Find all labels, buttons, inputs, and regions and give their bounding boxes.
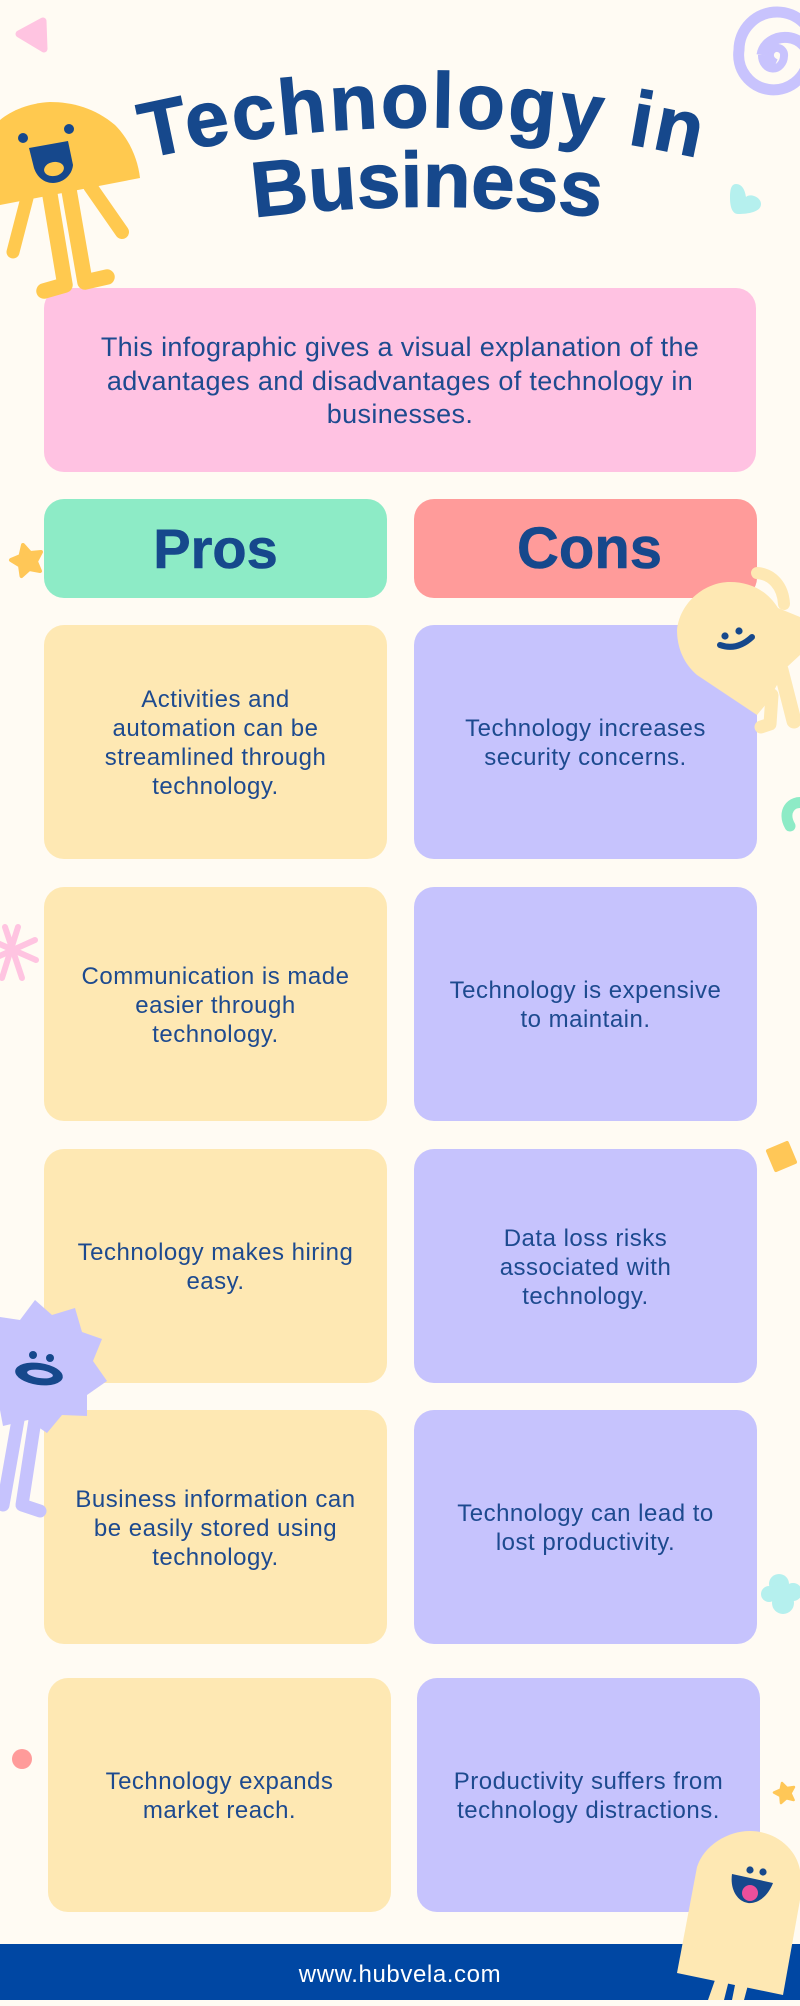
con card 1 bbox=[414, 625, 757, 859]
pro card 2: technology. bbox=[152, 1020, 279, 1048]
con card 5: technology distractions. bbox=[457, 1797, 720, 1824]
pro card 2: Communication is made bbox=[82, 962, 349, 990]
con card 3: Data loss risks bbox=[504, 1224, 667, 1252]
icon: purple spiral bbox=[739, 12, 800, 90]
footer bar: www.hubvela.com bbox=[299, 1961, 501, 1988]
character: yellow jellyfish bbox=[0, 102, 140, 291]
pro card 4: Business information can bbox=[75, 1486, 356, 1512]
title: Technology in bbox=[134, 70, 700, 158]
title bbox=[134, 70, 700, 218]
character: purple spiky bbox=[0, 1300, 107, 1511]
pro card 1 bbox=[44, 625, 387, 859]
heading: pros: Pros bbox=[153, 517, 278, 580]
pro card 4 bbox=[44, 1410, 387, 1644]
icon: teal heart bbox=[730, 184, 761, 214]
pro card 4: be easily stored using bbox=[94, 1514, 337, 1542]
title: Business bbox=[253, 150, 600, 218]
icon: pink asterisk bbox=[0, 927, 36, 978]
con card 2: to maintain. bbox=[520, 1006, 651, 1033]
icon: yellow star left bbox=[8, 543, 43, 578]
con card 1: Technology increases bbox=[465, 715, 706, 742]
intro panel: advantages and disadvantages of technology in bbox=[107, 366, 693, 396]
pro card 2: easier through bbox=[135, 992, 296, 1018]
pro card 1: technology. bbox=[152, 773, 279, 800]
con card 5: Productivity suffers from bbox=[454, 1768, 723, 1795]
pro card 5: market reach. bbox=[143, 1797, 296, 1824]
intro panel: businesses. bbox=[327, 399, 473, 429]
con card 3 bbox=[414, 1149, 757, 1383]
character: yellow heart blob bbox=[677, 573, 800, 727]
pro card 2 bbox=[44, 887, 387, 1121]
icon: teal clover bbox=[761, 1574, 800, 1614]
intro panel bbox=[44, 288, 756, 472]
heading: pros bbox=[44, 499, 387, 598]
icon: yellow diamond bbox=[768, 1143, 795, 1170]
con card 4: Technology can lead to bbox=[457, 1500, 714, 1527]
pro card 5: Technology expands bbox=[106, 1768, 333, 1795]
heading: cons: Cons bbox=[517, 516, 662, 581]
pro card 5 bbox=[48, 1678, 391, 1912]
con card 3: associated with bbox=[500, 1254, 671, 1280]
con card 2 bbox=[414, 887, 757, 1121]
con card 2: Technology is expensive bbox=[450, 977, 721, 1004]
pro card 3: Technology makes hiring bbox=[78, 1239, 353, 1266]
footer bar bbox=[0, 1944, 800, 2000]
intro panel: This infographic gives a visual explanation of the bbox=[101, 332, 699, 362]
con card 3: technology. bbox=[522, 1282, 649, 1310]
heading: cons bbox=[414, 499, 757, 598]
pro card 4: technology. bbox=[152, 1544, 279, 1570]
icon: pink triangle bbox=[19, 21, 44, 49]
pro card 3: easy. bbox=[186, 1268, 245, 1295]
con card 1: security concerns. bbox=[484, 744, 687, 771]
con card 5 bbox=[417, 1678, 760, 1912]
con card 4 bbox=[414, 1410, 757, 1644]
pro card 1: streamlined through bbox=[105, 744, 326, 771]
pro card 3 bbox=[44, 1149, 387, 1383]
icon: red dot bbox=[12, 1749, 32, 1769]
icon: mint arc bbox=[787, 803, 800, 826]
con card 4: lost productivity. bbox=[496, 1529, 675, 1556]
icon: small yellow star bbox=[774, 1783, 794, 1803]
pro card 1: automation can be bbox=[112, 715, 318, 742]
character: cream popsicle bbox=[677, 1831, 800, 2000]
pro card 1: Activities and bbox=[141, 686, 290, 713]
